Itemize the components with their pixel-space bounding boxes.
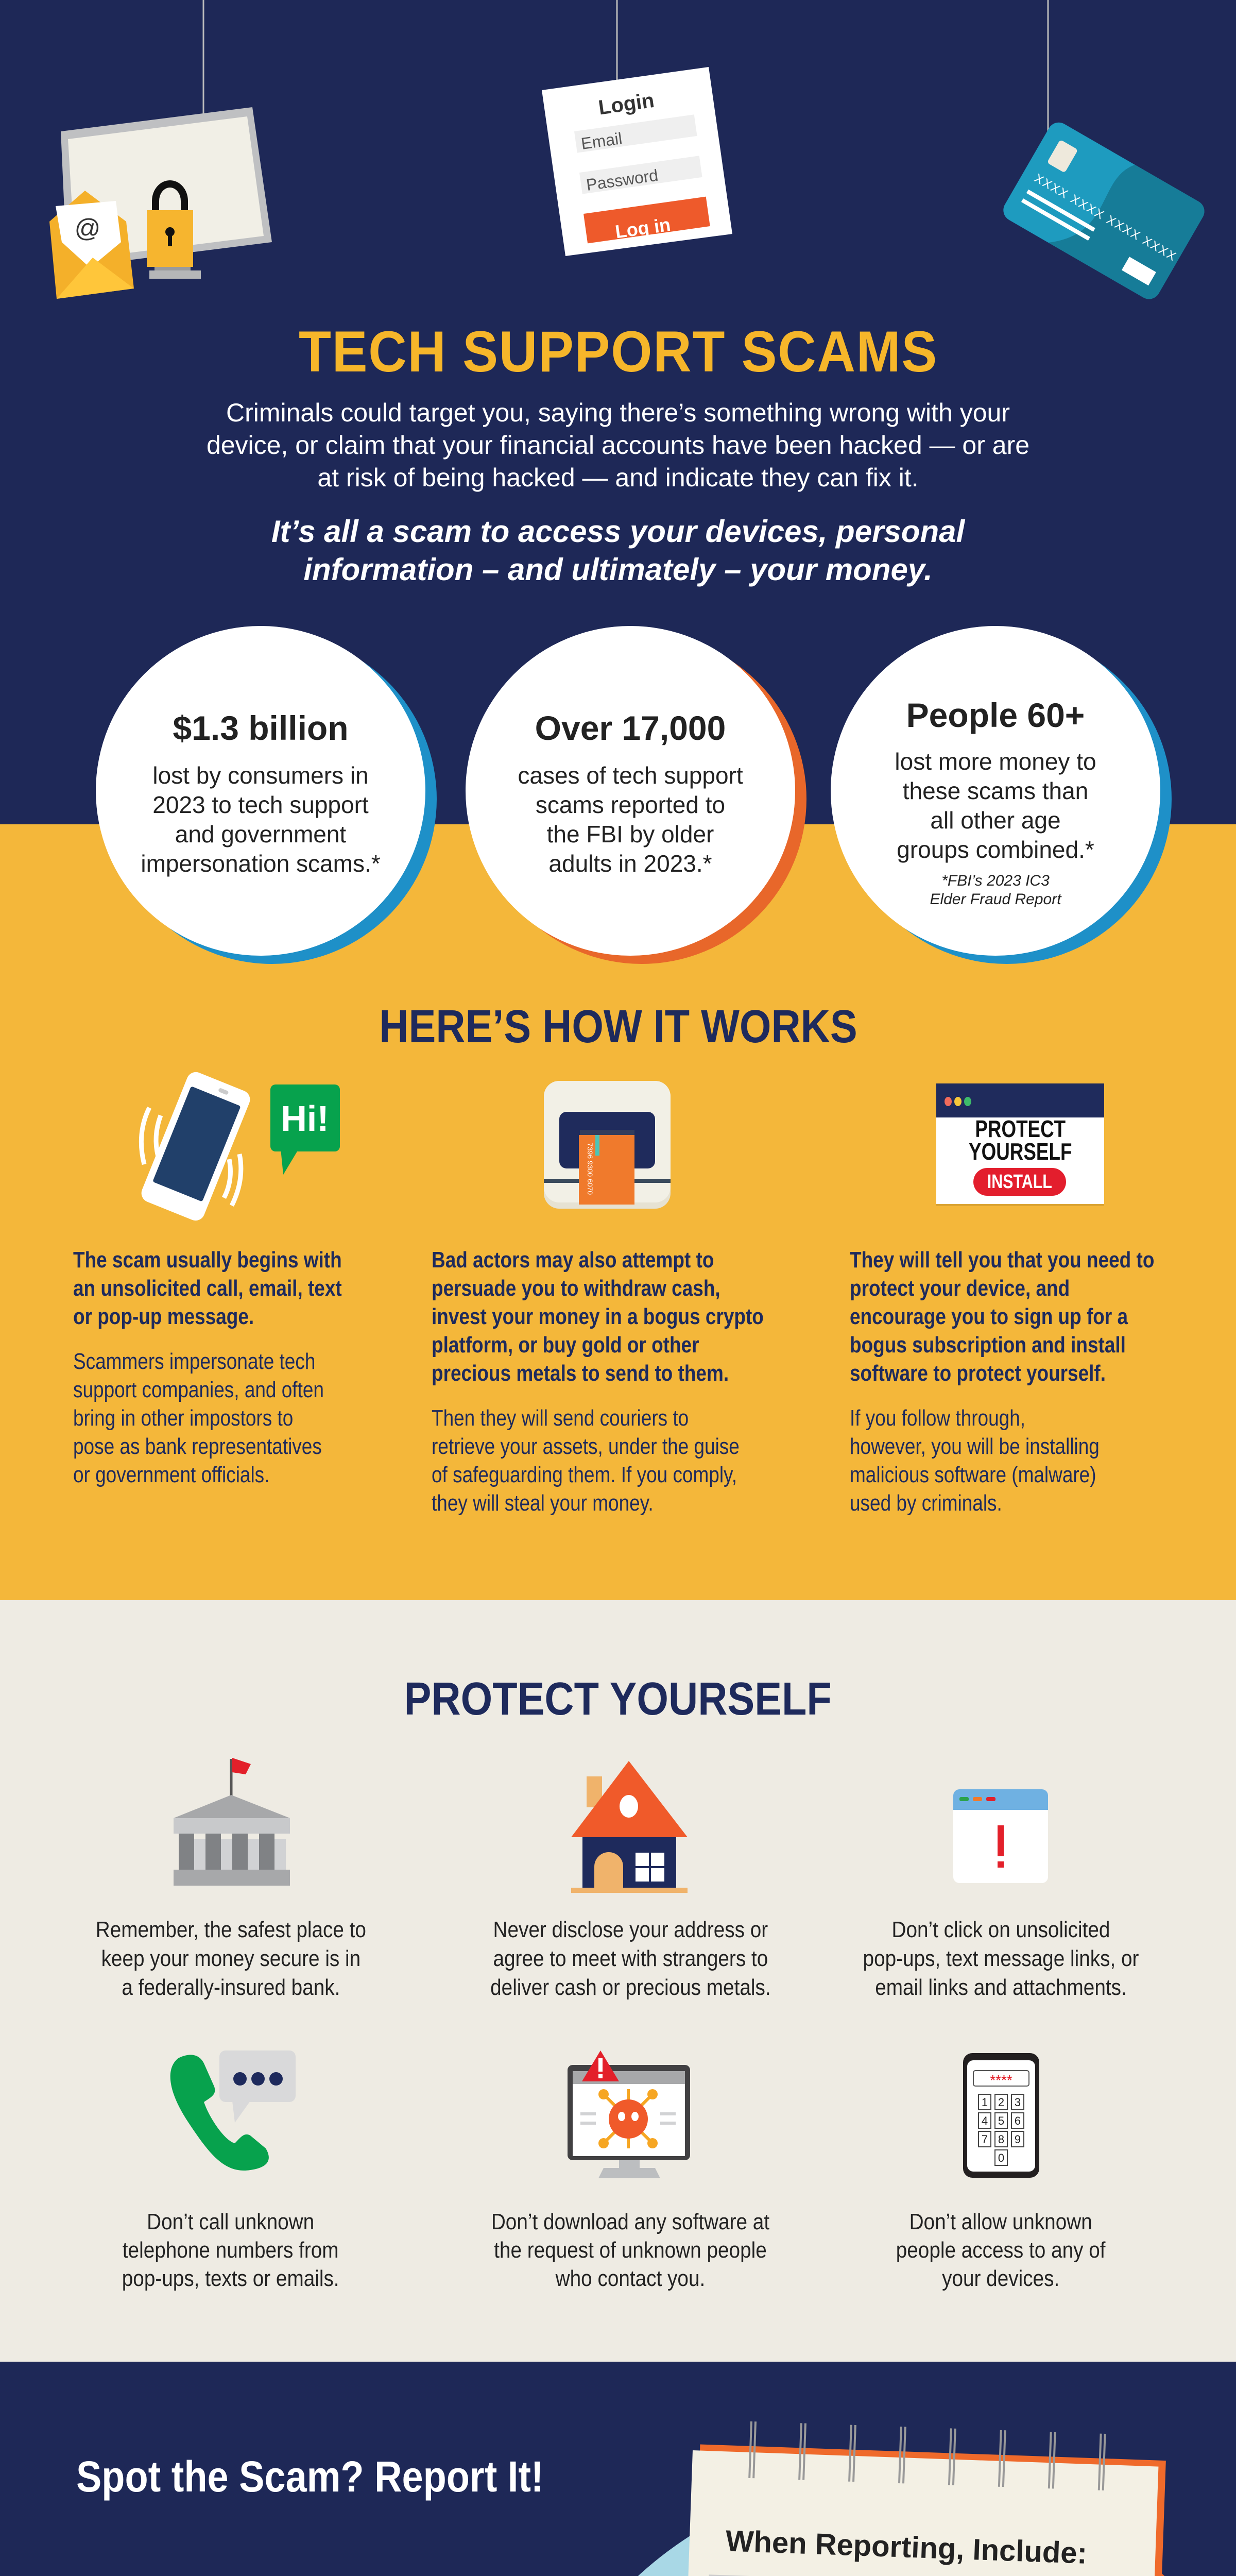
text block: how it works column 2: invest your money in a bogus crypto bbox=[432, 1304, 764, 1329]
text block: how it works column 3: protect your device, and bbox=[850, 1276, 1070, 1301]
italic tagline: It’s all a scam to access your devices, personal bbox=[271, 514, 965, 549]
icon: hanging credit card bbox=[999, 0, 1209, 303]
stat circle 2: cases of tech support bbox=[518, 762, 743, 789]
stat circle 2 bbox=[466, 626, 806, 964]
text block: how it works column 1: Scammers impersonate tech bbox=[73, 1349, 315, 1374]
icon: smartphone keypad: 2 bbox=[998, 2096, 1004, 2109]
intro text bbox=[207, 398, 1029, 492]
text: protect tip 2: Never disclose your address or bbox=[493, 1917, 768, 1942]
text: protect tip 3 bbox=[863, 1917, 1139, 2000]
text: protect tip 1: Remember, the safest place to bbox=[95, 1917, 366, 1942]
icon: install button bbox=[973, 1168, 1066, 1196]
text: protect tip 5: who contact you. bbox=[556, 2266, 705, 2291]
icon: alert popup bbox=[953, 1789, 1048, 1883]
intro text: at risk of being hacked — and indicate they can fix it. bbox=[317, 463, 919, 492]
text: protect tip 5: Don’t download any software at bbox=[491, 2209, 769, 2234]
intro text: device, or claim that your financial accounts have been hacked — or are bbox=[207, 431, 1029, 460]
text block: how it works column 2: Then they will send couriers to bbox=[432, 1405, 689, 1431]
icon: install popup window: PROTECT bbox=[975, 1115, 1066, 1142]
text: protect tip 1 bbox=[95, 1917, 366, 2000]
text: protect tip 2: agree to meet with strangers to bbox=[493, 1946, 768, 1971]
icon: smartphone keypad: **** bbox=[990, 2072, 1012, 2088]
stat circle 1: impersonation scams.* bbox=[141, 850, 381, 877]
panel: report it section bbox=[0, 2362, 1236, 2576]
italic tagline: information – and ultimately – your money. bbox=[303, 552, 933, 587]
title: TECH SUPPORT SCAMS bbox=[298, 319, 938, 384]
text block: how it works column 2: persuade you to withdraw cash, bbox=[432, 1276, 720, 1301]
text block: how it works column 1: pose as bank representatives bbox=[73, 1434, 322, 1459]
text block: how it works column 1: or government officials. bbox=[73, 1462, 269, 1487]
icon: house bbox=[571, 1761, 688, 1893]
stat circle 3: groups combined.* bbox=[897, 836, 1094, 863]
icon: smartphone keypad: 3 bbox=[1015, 2096, 1021, 2109]
text: protect tip 6 bbox=[820, 2208, 1181, 2293]
text block: how it works column 3: If you follow through, bbox=[850, 1405, 1025, 1431]
text: protect tip 6: people access to any of bbox=[896, 2238, 1105, 2263]
stat circle 3: *FBI’s 2023 IC3 bbox=[941, 872, 1050, 889]
italic tagline bbox=[271, 514, 965, 587]
text block: how it works column 2: retrieve your assets, under the guise bbox=[432, 1434, 740, 1459]
heading: spot the scam: Spot the Scam? Report It! bbox=[76, 2452, 544, 2501]
stat circle 3: lost more money to bbox=[895, 748, 1096, 775]
text: protect tip 4: telephone numbers from bbox=[123, 2238, 339, 2263]
icon: hanging monitor with lock: @ bbox=[75, 214, 100, 243]
heading: how it works: HERE’S HOW IT WORKS bbox=[379, 1001, 857, 1053]
stat circle 1: 2023 to tech support bbox=[152, 791, 369, 818]
text block: how it works column 3: software to protect yourself. bbox=[850, 1361, 1106, 1386]
stat circle 1: $1.3 billion bbox=[173, 709, 349, 747]
stat circle 2: the FBI by older bbox=[547, 821, 714, 848]
stat circle 2: adults in 2023.* bbox=[548, 850, 712, 877]
text block: how it works column 3: malicious software (malware) bbox=[850, 1462, 1096, 1487]
text: protect tip 2 bbox=[490, 1917, 770, 2000]
text block: how it works column 1: support companies, and often bbox=[73, 1377, 324, 1402]
text block: how it works column 1: or pop-up message. bbox=[73, 1304, 254, 1329]
text: protect tip 1: keep your money secure is in bbox=[101, 1946, 360, 1971]
text block: how it works column 2 bbox=[432, 1247, 764, 1516]
icon: monitor with virus bbox=[568, 2050, 690, 2182]
notepad heading: When Reporting, Include: bbox=[725, 2524, 1088, 2570]
checklist items bbox=[692, 2574, 1141, 2576]
text: protect tip 6: your devices. bbox=[942, 2266, 1059, 2291]
text block: how it works column 2: they will steal your money. bbox=[432, 1490, 654, 1516]
text block: how it works column 3: encourage you to sign up for a bbox=[850, 1304, 1128, 1329]
icon: smartphone keypad: 1 bbox=[982, 2096, 988, 2109]
text: protect tip 1: a federally-insured bank. bbox=[122, 1975, 340, 2000]
icon: install button: INSTALL bbox=[987, 1171, 1052, 1193]
icon: install popup window: YOURSELF bbox=[969, 1138, 1072, 1165]
header illustrations bbox=[49, 0, 1204, 299]
stat circle 3 bbox=[831, 626, 1172, 964]
intro text: Criminals could target you, saying there’s something wrong with your bbox=[226, 398, 1010, 427]
text: protect tip 4: Don’t call unknown bbox=[147, 2209, 314, 2234]
stat circle 2: Over 17,000 bbox=[535, 709, 726, 747]
icon: install popup window bbox=[936, 1083, 1104, 1204]
text block: how it works column 2: platform, or buy gold or other bbox=[432, 1332, 699, 1358]
stat circle 3: People 60+ bbox=[906, 696, 1085, 734]
text block: how it works column 3: however, you will be installing bbox=[850, 1434, 1100, 1459]
text block: how it works column 3: bogus subscription and install bbox=[850, 1332, 1126, 1358]
text: protect tip 6: Don’t allow unknown bbox=[909, 2209, 1092, 2234]
icon: ATM with debit card: 7396 9300 6070 bbox=[586, 1143, 594, 1195]
icon: smartphone keypad: 8 bbox=[998, 2133, 1004, 2146]
icon: smartphone keypad: 6 bbox=[1015, 2114, 1021, 2127]
icon: smartphone keypad: 9 bbox=[1015, 2133, 1021, 2146]
icon: bank bbox=[174, 1758, 290, 1886]
section: light protect background bbox=[0, 1600, 1236, 2362]
icon: smartphone keypad: 4 bbox=[982, 2114, 988, 2127]
icon: hanging login card bbox=[542, 0, 732, 256]
icon: hanging login card: Email bbox=[580, 129, 623, 153]
stat circle 1 bbox=[96, 626, 437, 964]
text: protect tip 3: pop-ups, text message links, or bbox=[863, 1946, 1139, 1971]
panel: notepad checklist bbox=[671, 2450, 1158, 2576]
text block: how it works column 2: precious metals to send to them. bbox=[432, 1361, 729, 1386]
light blue circle with orange arc bbox=[0, 2362, 1236, 2576]
icon: hanging monitor with lock bbox=[49, 0, 272, 299]
stat circle 2: scams reported to bbox=[536, 791, 725, 818]
text block: how it works column 1: The scam usually begins with bbox=[73, 1247, 342, 1273]
text block: how it works column 1: bring in other impostors to bbox=[73, 1405, 293, 1431]
icon: ATM with debit card bbox=[544, 1081, 671, 1209]
text: protect tip 3: email links and attachments. bbox=[875, 1975, 1126, 2000]
icon: smartphone keypad bbox=[963, 2053, 1039, 2178]
icon: smartphone keypad: 0 bbox=[998, 2151, 1004, 2164]
text block: how it works column 2: of safeguarding them. If you comply, bbox=[432, 1462, 737, 1487]
stat circle 3: all other age bbox=[930, 807, 1061, 834]
icon: hanging login card: Login bbox=[597, 89, 656, 119]
icon: green phone with chat bbox=[168, 2050, 297, 2175]
icon: smartphone keypad: 7 bbox=[982, 2133, 988, 2146]
text: protect tip 5: the request of unknown people bbox=[494, 2238, 767, 2263]
text block: how it works column 2: Bad actors may also attempt to bbox=[432, 1247, 714, 1273]
text block: how it works column 3: They will tell you that you need to bbox=[850, 1247, 1154, 1273]
section: yellow how it works background bbox=[0, 824, 1236, 1600]
heading: protect yourself: PROTECT YOURSELF bbox=[404, 1673, 832, 1725]
icon: hanging login card: Password bbox=[585, 166, 659, 194]
text: protect tip 5 bbox=[450, 2208, 811, 2293]
text block: how it works column 1 bbox=[73, 1247, 342, 1487]
section: navy header background bbox=[0, 0, 1236, 824]
icon: hanging credit card: XXXX XXXX XXXX XXXX bbox=[1032, 171, 1179, 264]
icon: ringing phone with Hi bubble: Hi! bbox=[281, 1098, 329, 1139]
text block: how it works column 3: used by criminals. bbox=[850, 1490, 1002, 1516]
spiral rings bbox=[692, 2419, 1160, 2498]
text: protect tip 4 bbox=[50, 2208, 411, 2293]
icon: ringing phone with Hi bubble bbox=[139, 1072, 340, 1221]
stat circle 1: lost by consumers in bbox=[152, 762, 369, 789]
text: protect tip 3: Don’t click on unsolicited bbox=[891, 1917, 1110, 1942]
stat circle 3: these scams than bbox=[903, 777, 1088, 804]
text block: how it works column 1: an unsolicited call, email, text bbox=[73, 1276, 342, 1301]
icon: hanging login card: Log in bbox=[614, 214, 672, 242]
icon: smartphone keypad: 5 bbox=[998, 2114, 1004, 2127]
text: protect tip 2: deliver cash or precious metals. bbox=[490, 1975, 770, 2000]
stat circle 1: and government bbox=[175, 821, 346, 848]
stat circle 3: Elder Fraud Report bbox=[930, 891, 1061, 908]
text block: how it works column 3 bbox=[850, 1247, 1154, 1516]
text: protect tip 4: pop-ups, texts or emails. bbox=[122, 2266, 339, 2291]
